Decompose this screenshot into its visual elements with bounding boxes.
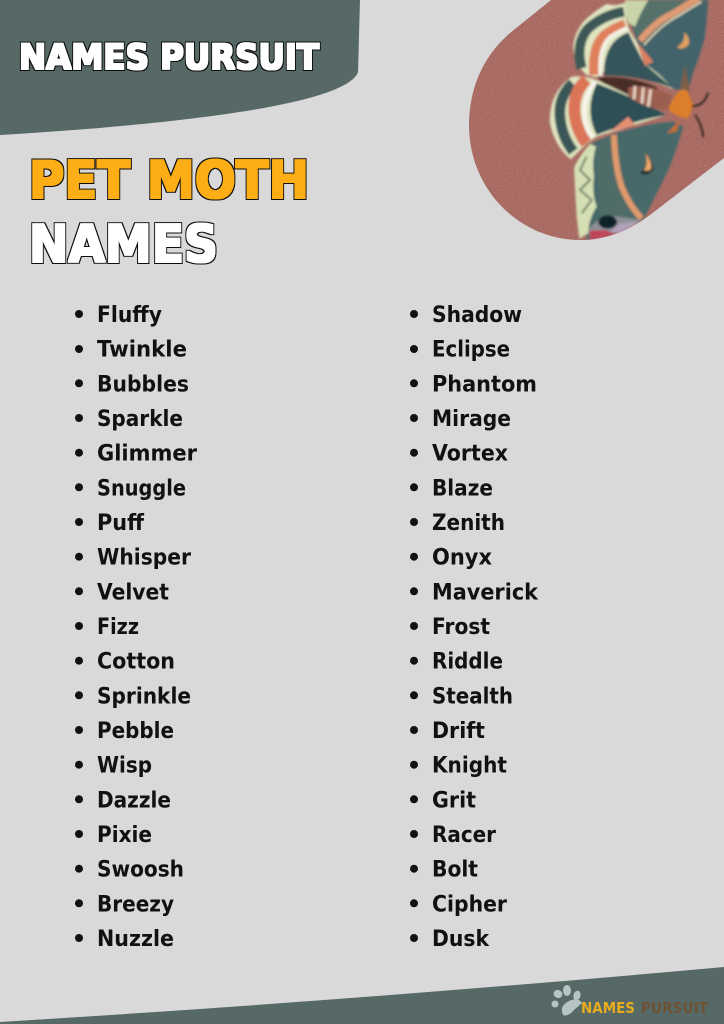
- footer logo text: [581, 999, 709, 1017]
- name: Vortex: Vortex: [432, 441, 508, 467]
- name: Pixie: Pixie: [97, 822, 152, 848]
- name: Puff: [75, 510, 145, 536]
- name: Blaze: Blaze: [432, 475, 493, 501]
- name: Riddle: Riddle: [432, 649, 503, 675]
- footer band: [0, 967, 724, 1024]
- name: Wisp: [75, 753, 152, 779]
- name: Puff: Puff: [97, 510, 145, 536]
- brand name: NAMES PURSUIT: [19, 38, 319, 78]
- name: Frost: [410, 614, 490, 640]
- name: Bolt: [410, 857, 478, 883]
- name: Grit: [410, 787, 476, 813]
- name: Dusk: [410, 926, 490, 952]
- name: Glimmer: Glimmer: [97, 441, 198, 467]
- name: Breezy: Breezy: [97, 891, 174, 917]
- name: Dazzle: Dazzle: [97, 787, 171, 813]
- gap behind abdomen: [597, 76, 658, 96]
- title: [29, 151, 309, 275]
- name: Stealth: Stealth: [432, 683, 513, 709]
- name: Shadow: Shadow: [432, 302, 522, 328]
- lower hindwing: [550, 76, 667, 159]
- upper forewing: [625, 0, 708, 90]
- title line: pet moth: PET MOTH: [29, 151, 309, 211]
- name: Racer: [410, 822, 497, 848]
- upper hindwing: [573, 3, 673, 89]
- name: Grit: Grit: [432, 787, 476, 813]
- name: Fluffy: [75, 302, 162, 328]
- name: Twinkle: Twinkle: [97, 337, 187, 363]
- name: Whisper: Whisper: [97, 545, 192, 571]
- moth body: [628, 65, 708, 137]
- name: Knight: Knight: [432, 753, 507, 779]
- name: Blaze: [410, 475, 493, 501]
- logo word: pursuit: PURSUIT: [641, 999, 709, 1017]
- name: Pixie: [75, 822, 152, 848]
- name: Wisp: Wisp: [97, 753, 152, 779]
- names list: left column: [75, 302, 198, 952]
- name: Cotton: Cotton: [97, 649, 175, 675]
- name: Frost: Frost: [432, 614, 490, 640]
- name: Zenith: Zenith: [432, 510, 505, 536]
- name: Drift: [410, 718, 485, 744]
- icon: paw logo: [552, 985, 582, 1015]
- name: Onyx: Onyx: [432, 545, 492, 571]
- name: Fluffy: Fluffy: [97, 302, 162, 328]
- name: Phantom: Phantom: [432, 371, 537, 397]
- name: Fizz: Fizz: [97, 614, 139, 640]
- name: Bolt: Bolt: [432, 857, 478, 883]
- name: Bubbles: Bubbles: [97, 371, 189, 397]
- name: Velvet: Velvet: [97, 579, 169, 605]
- lower forewing: [574, 122, 683, 240]
- name: Cipher: Cipher: [432, 891, 508, 917]
- name: Mirage: Mirage: [432, 406, 511, 432]
- name: Sparkle: Sparkle: [97, 406, 183, 432]
- name: Pebble: Pebble: [97, 718, 174, 744]
- name: Sprinkle: Sprinkle: [97, 683, 191, 709]
- name: Swoosh: Swoosh: [97, 857, 184, 883]
- name: Dusk: Dusk: [432, 926, 490, 952]
- name: Fizz: [75, 614, 139, 640]
- name: Maverick: Maverick: [432, 579, 539, 605]
- name: Racer: Racer: [432, 822, 497, 848]
- name: Riddle: [410, 649, 503, 675]
- name: Nuzzle: Nuzzle: [97, 926, 174, 952]
- name: Drift: Drift: [432, 718, 485, 744]
- moth photo in rotated pill shape: [460, 0, 724, 245]
- names list: right column: [410, 302, 539, 952]
- title line: names: NAMES: [29, 215, 218, 275]
- header banner: [0, 0, 360, 135]
- logo word: names: NAMES: [581, 999, 635, 1017]
- name: Snuggle: Snuggle: [97, 475, 186, 501]
- name: Eclipse: Eclipse: [432, 337, 510, 363]
